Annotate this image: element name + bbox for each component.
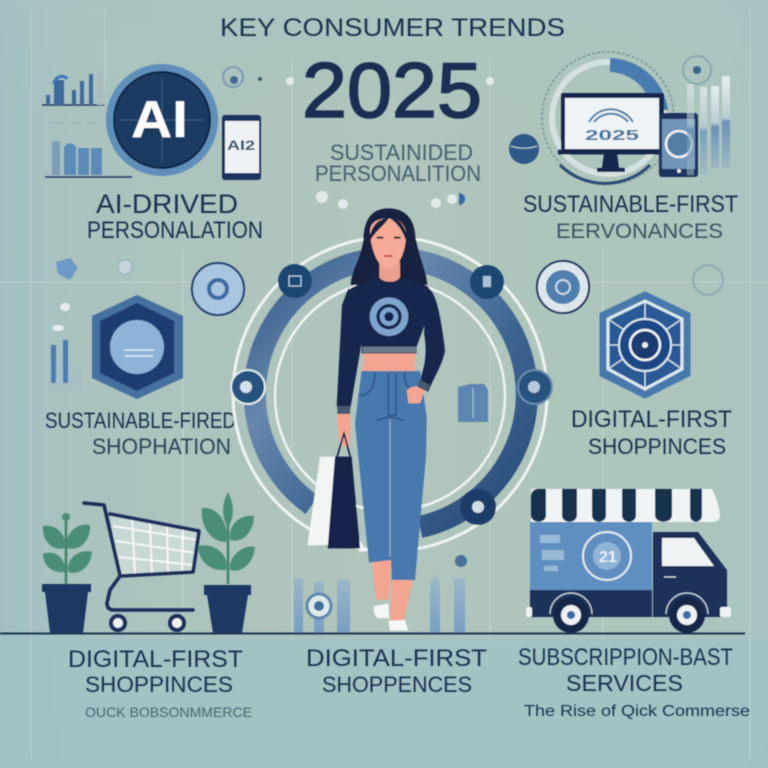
- label: SHOPPINCES: [85, 672, 233, 697]
- icon: bars and orbs: [509, 56, 730, 175]
- label: [571, 406, 732, 459]
- icon: AI badge: [106, 64, 218, 176]
- hand in pocket: [407, 386, 425, 403]
- subtitle: PERSONALITION: [315, 161, 481, 186]
- label: [45, 408, 236, 459]
- icon: circular gauge: [542, 52, 674, 184]
- centre bottom label: DIGITAL-FIRST: [306, 645, 487, 672]
- label: [518, 644, 750, 720]
- label: OUCK BOBSONMMERCE: [85, 704, 252, 720]
- label: SHOPPINCES: [588, 434, 726, 459]
- ring node: [460, 489, 496, 525]
- icon: emblem: [192, 263, 244, 315]
- ring node: [231, 370, 265, 404]
- label: PERSONALATION: [87, 217, 263, 244]
- neck and face: [379, 262, 400, 282]
- ground line: [0, 632, 745, 634]
- icon: tablet: AI2: [227, 137, 255, 153]
- ring node: [278, 264, 312, 298]
- label: SUBSCRIPPION-BAST: [518, 644, 733, 671]
- panel: digital-first shopping (right): [537, 261, 732, 459]
- jeans: [355, 371, 427, 580]
- panel: delivery truck and subscriptions: [518, 489, 750, 720]
- label: [87, 189, 263, 244]
- label: SHOPHATION: [92, 434, 231, 459]
- label: EERVONANCES: [556, 220, 723, 243]
- floating dots: [286, 77, 494, 209]
- label: DIGITAL-FIRST: [571, 406, 732, 433]
- icon: small orb: [223, 67, 262, 87]
- shirt: [350, 277, 430, 353]
- icon: hexagon target: [601, 293, 689, 397]
- icon: left plant: [42, 513, 92, 633]
- centre bottom label: [306, 645, 487, 697]
- icon: monitor: [558, 93, 665, 172]
- icon: small bars and shapes: [49, 258, 132, 390]
- icon: delivery truck: 21: [599, 549, 617, 566]
- subtitle: SUSTAINIDED: [330, 140, 473, 165]
- figure: woman with shopping bags: [307, 208, 445, 631]
- icon: phone: [659, 113, 698, 177]
- icon: bar charts: [42, 72, 132, 177]
- dark bag: [328, 457, 360, 548]
- label: SUSTAINABLE-FIRST: [523, 191, 738, 218]
- label: [523, 191, 738, 243]
- label: [68, 646, 252, 720]
- icon: hexagon badge: [92, 295, 183, 399]
- right arm: [417, 287, 445, 392]
- skyline behind figure: [294, 555, 467, 633]
- icon: AI badge: AI: [131, 91, 188, 149]
- hair: [351, 208, 427, 285]
- panel: sustainable-fired shopping: [45, 258, 244, 459]
- panel: sustainable-first: [509, 52, 738, 243]
- year 2025: 2025: [302, 46, 482, 134]
- icon: monitor: 2025: [585, 127, 639, 144]
- label: AI-DRIVED: [96, 189, 238, 219]
- icon: emblem: [537, 261, 723, 313]
- icon: delivery truck: [526, 489, 731, 633]
- title: KEY CONSUMER TRENDS: [220, 14, 565, 42]
- white bag: [307, 457, 353, 546]
- label: SUSTAINABLE-FIRED: [45, 408, 236, 433]
- icon: shopping cart: [84, 503, 199, 630]
- shirt logo: [370, 297, 408, 336]
- shoes: [374, 603, 408, 631]
- icon: small booklet: [458, 384, 488, 422]
- ring node: [518, 370, 552, 404]
- label: SERVICES: [566, 670, 683, 696]
- centre bottom label: SHOPPENCES: [322, 672, 472, 697]
- label: The Rise of Qick Commerse: [524, 703, 750, 720]
- panel: AI-driven personalization: [42, 64, 263, 244]
- icon: tablet: [222, 115, 261, 180]
- left arm with hand: [337, 288, 365, 407]
- panel: cart and plants: [42, 492, 255, 720]
- midriff: [362, 353, 415, 373]
- label: DIGITAL-FIRST: [68, 646, 243, 673]
- icon: right plant: [198, 492, 255, 633]
- central ring diagram: [231, 237, 552, 551]
- ring node: [470, 265, 504, 299]
- subtitle: [315, 140, 481, 186]
- awning: [531, 489, 720, 522]
- legs: [372, 560, 413, 623]
